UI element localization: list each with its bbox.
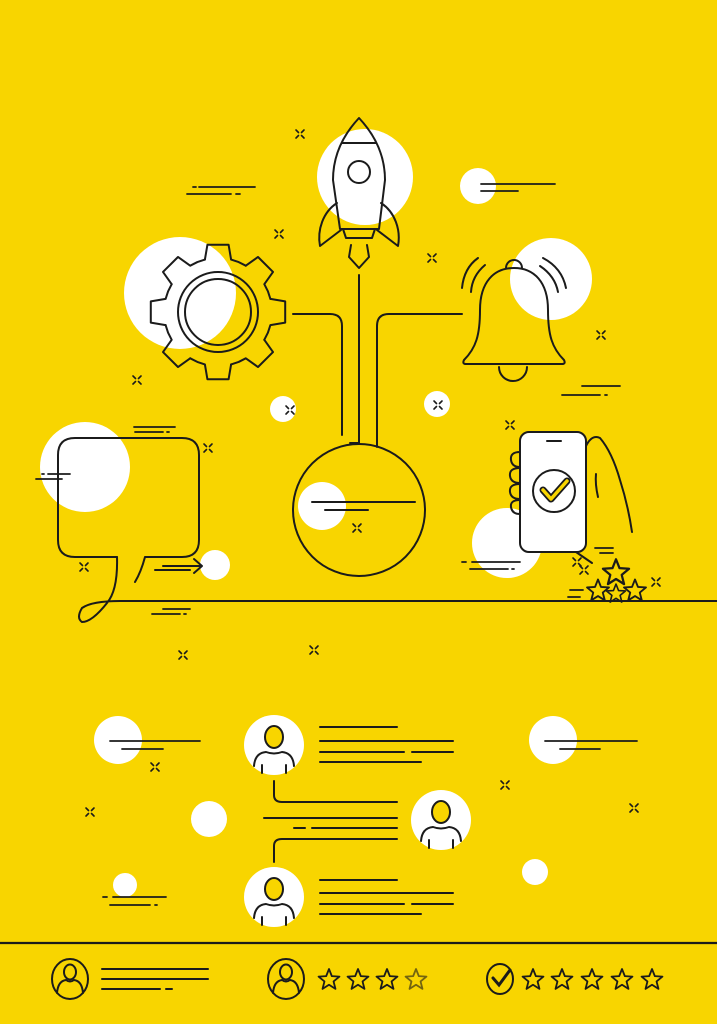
person 3 (244, 867, 304, 927)
footer user 1 (52, 959, 208, 999)
icon: flask circle (293, 444, 425, 576)
person 1 (244, 715, 304, 775)
footer divider (0, 942, 717, 944)
footer verified with six stars (487, 964, 662, 994)
hierarchy connectors and text lines (264, 727, 453, 914)
connector lines (293, 275, 462, 447)
team hierarchy (244, 715, 471, 927)
person 2 (411, 790, 471, 850)
footer user 2 with four stars (268, 959, 426, 999)
icon: rocket (319, 118, 399, 268)
white background circles (40, 129, 592, 897)
icon: bell (462, 258, 566, 381)
footer: reviews row (52, 959, 662, 999)
icon: rating stars (587, 559, 646, 602)
icon: gear (151, 245, 285, 379)
sparkles (80, 130, 660, 816)
decorative speed lines (36, 184, 637, 905)
icon: speech bubble (58, 438, 717, 622)
icon: phone in hand (510, 432, 632, 563)
